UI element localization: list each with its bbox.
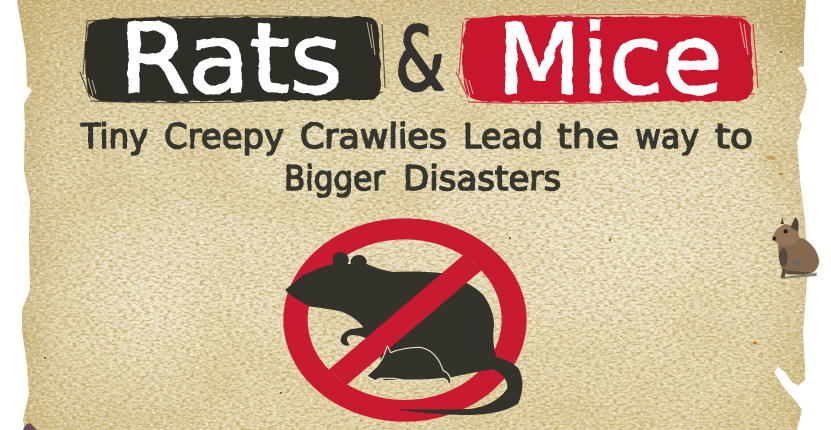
title word: Mice: Mice	[497, 4, 723, 116]
mouse body	[778, 238, 819, 274]
cut-off purple corner object	[23, 423, 37, 430]
subtitle: the	[557, 117, 619, 157]
mouse head	[773, 224, 799, 246]
subtitle: Disasters	[403, 159, 561, 199]
rat silhouette	[285, 252, 522, 415]
subtitle	[80, 117, 753, 199]
subtitle: Bigger	[284, 159, 385, 199]
mouse chest shade	[779, 248, 788, 267]
icon: small brown mouse on the edge	[772, 217, 819, 279]
mouse belly fur	[792, 259, 801, 267]
mouse ears	[781, 217, 799, 232]
mouse shadow	[782, 273, 817, 279]
mouse legs	[781, 268, 812, 278]
small mouse silhouette	[367, 346, 451, 387]
subtitle: Lead	[463, 117, 543, 157]
title banner: Mice	[456, 4, 758, 116]
title banner: Rats	[80, 3, 385, 115]
icon: no-rats prohibition sign	[283, 218, 527, 422]
subtitle: way	[635, 117, 699, 157]
mouse eye	[784, 229, 788, 233]
title ampersand: &	[395, 8, 445, 111]
subtitle: Tiny	[80, 117, 148, 157]
title word: Rats: Rats	[119, 3, 343, 115]
mouse snout	[772, 237, 776, 241]
prohibition slash	[328, 255, 482, 385]
prohibition ring	[283, 218, 527, 422]
subtitle: Crawlies	[300, 117, 447, 157]
subtitle: to	[715, 117, 753, 157]
subtitle: Creepy	[164, 117, 284, 157]
